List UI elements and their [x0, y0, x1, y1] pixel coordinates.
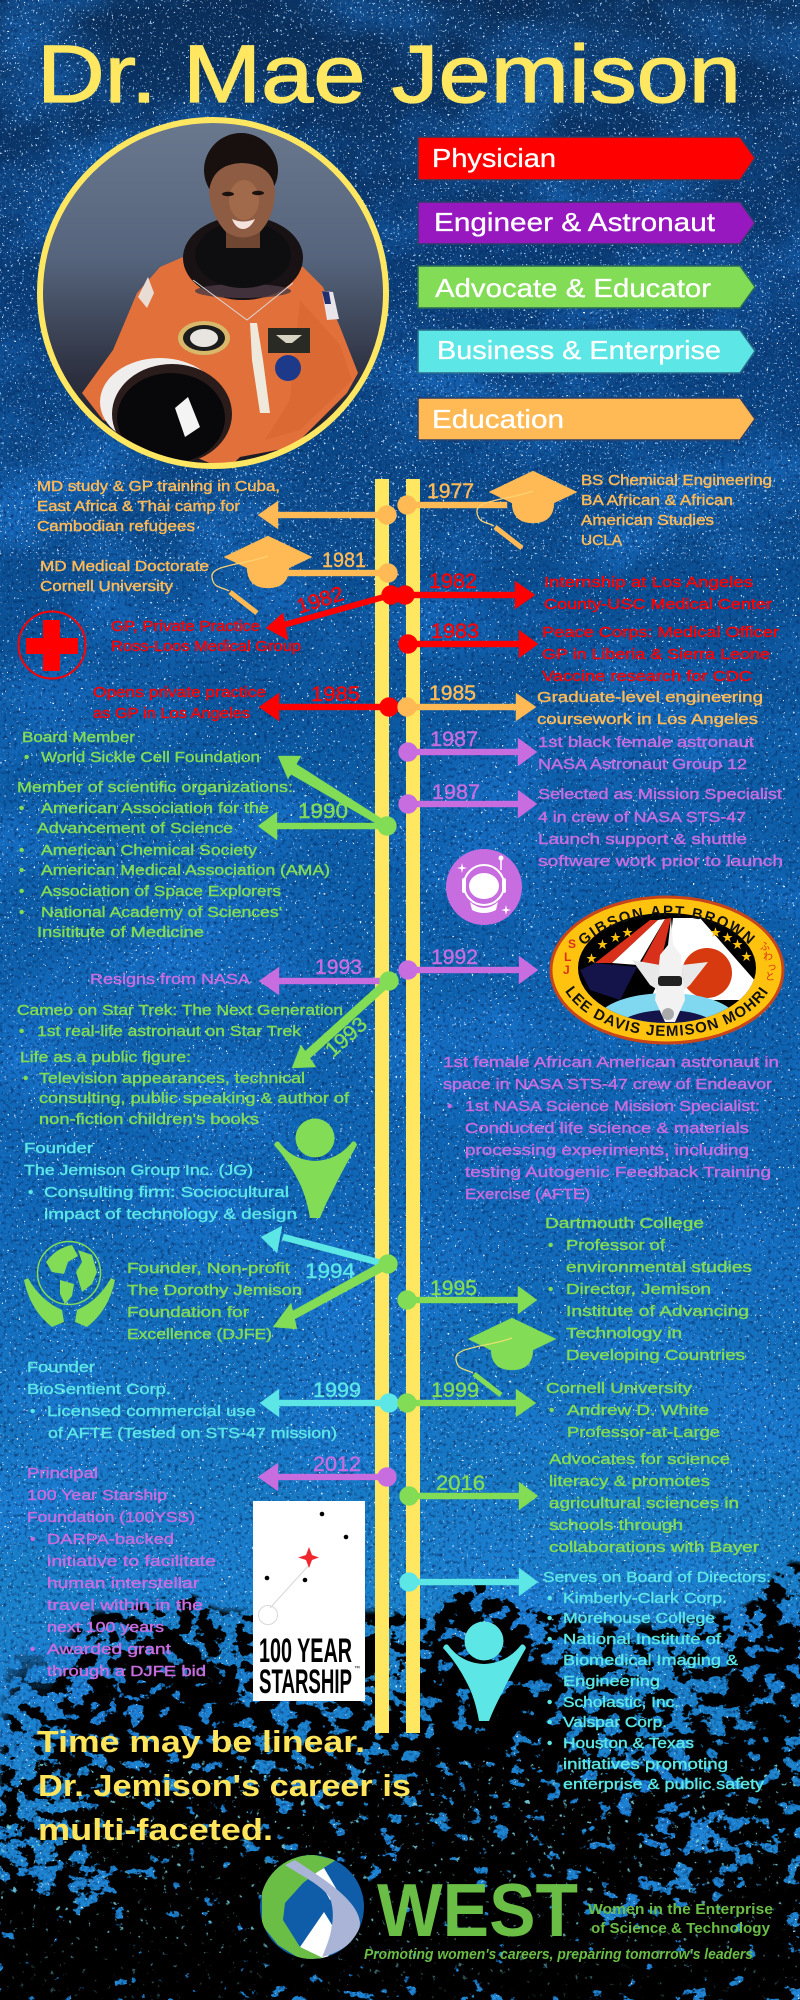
1990 advocate: board member and scientific organizations: National Academy of Sciences': [41, 904, 282, 921]
astronaut: first African American woman in space: Conducted life science & materials: [465, 1120, 749, 1137]
1990 advocate: board member and scientific organizations: [17, 729, 396, 941]
1995 advocate: Dartmouth College: Institute of Advancing: [566, 1303, 749, 1320]
1982 physician: GP private practice: GP, Private Practice: [111, 618, 260, 635]
1985 education: graduate engineering: [398, 682, 763, 728]
1977 education: BS and BA at UCLA: BA African & African: [581, 492, 733, 509]
1982 physician: internship: 1982: [429, 570, 477, 593]
2012 astronaut: 100 Year Starship: 100 Year Starship: [27, 1487, 167, 1504]
organisation name: Women in the Enterprise: [588, 1901, 773, 1918]
2012 astronaut: 100 Year Starship: [27, 1453, 396, 1680]
1987 astronaut: first black female astronaut: NASA Astronaut Group 12: [538, 756, 747, 773]
2016 advocate: science literacy: schools through: [549, 1517, 683, 1534]
STS-47 mission patch: ★: [741, 951, 752, 963]
1987 astronaut: first black female astronaut: 1st black female astronaut: [538, 734, 755, 751]
2012 astronaut: 100 Year Starship: DARPA-backed: [47, 1531, 174, 1548]
closing statement: Dr. Jemison's career is: [38, 1768, 411, 1803]
business: boards of directors: Houston & Texas: [563, 1735, 694, 1752]
business: boards of directors: •: [547, 1714, 552, 1731]
1999 advocate: Cornell University: Professor-at-Large: [567, 1424, 720, 1441]
1995 advocate: Dartmouth College: Director, Jemison: [566, 1281, 711, 1298]
business: boards of directors: National Institute of: [563, 1631, 722, 1648]
legend: physician: Physician: [432, 143, 556, 173]
1990 advocate: board member and scientific organizations: •: [19, 883, 24, 900]
2016 advocate: science literacy: [400, 1451, 759, 1556]
1999 business: BioSentient Corp: [27, 1359, 398, 1442]
1995 advocate: Dartmouth College: •: [548, 1237, 553, 1254]
business: boards of directors: Engineering: [563, 1673, 660, 1690]
business: boards of directors: •: [547, 1610, 552, 1627]
1977 education: BS and BA at UCLA: BS Chemical Engineering: [581, 472, 772, 489]
1990 advocate: board member and scientific organizations: •: [24, 749, 29, 766]
100 Year Starship logo: 100 YEAR: [259, 1632, 352, 1670]
portrait of Dr. Jemison in orange suit: [40, 120, 386, 470]
1987 astronaut: mission specialist: 1987: [432, 781, 480, 804]
1985 education: graduate engineering: coursework in Los Angeles: [537, 711, 758, 728]
1983 physician: Peace Corps: Peace Corps: Medical Officer: [542, 624, 779, 641]
1983 physician: Peace Corps: 1983: [431, 620, 479, 643]
astronaut: first African American woman in space: space in NASA STS-47 crew of Endeavor: [443, 1076, 772, 1093]
1990 advocate: board member and scientific organizations: American Medical Association (AMA): [41, 862, 330, 879]
business: boards of directors: •: [547, 1694, 552, 1711]
1993 advocate: Star Trek and public figure: •: [23, 1070, 28, 1087]
1999 business: BioSentient Corp: •: [30, 1403, 35, 1420]
1995 advocate: Dartmouth College: •: [548, 1281, 553, 1298]
2012 astronaut: 100 Year Starship: travel within in the: [47, 1597, 203, 1614]
1982 physician: GP private practice: Ross-Loos Medical Group: [111, 638, 301, 655]
astronaut: first African American woman in space: 1st female African American astronaut in: [443, 1054, 779, 1071]
advocate: Dorothy Jemison Foundation: Founder, Non-profit: [127, 1260, 291, 1277]
organisation name: of Science & Technology: [591, 1920, 771, 1937]
icon: globe in hands: [24, 1242, 115, 1327]
1990 advocate: board member and scientific organizations: American Association for the: [41, 800, 269, 817]
1999 business: BioSentient Corp: of AFTE (Tested on STS-47 mission): [48, 1425, 337, 1442]
1987 astronaut: mission specialist: 4 in crew of NASA STS-47: [538, 809, 746, 826]
2012 astronaut: 100 Year Starship: Principal: [27, 1465, 98, 1482]
cyan arrow to Jemison Group: 1994: [305, 1260, 355, 1283]
1993 advocate: Star Trek and public figure: 1st real-life astronaut on Star Trek: [37, 1023, 302, 1040]
icon: graduation cap: [456, 1318, 556, 1395]
1993 astronaut: resigns from NASA: [90, 956, 389, 995]
2016 advocate: science literacy: collaborations with Bayer: [549, 1539, 759, 1556]
2012 astronaut: 100 Year Starship: initiative to facilitate: [47, 1553, 216, 1570]
1990 advocate: board member and scientific organizations: •: [19, 800, 24, 817]
1987 astronaut: first black female astronaut: [398, 728, 755, 773]
1999 advocate: Cornell University: Cornell University: [546, 1380, 693, 1397]
1995 advocate: Dartmouth College: environmental studies: [566, 1259, 752, 1276]
legend: engineer and astronaut: Engineer & Astronaut: [434, 207, 716, 237]
legend: advocate and educator: [418, 266, 755, 308]
1999 advocate: Cornell University: •: [549, 1402, 554, 1419]
closing statement: [37, 1724, 411, 1847]
business: The Jemison Group: [24, 1140, 297, 1223]
1981 education: MD at Cornell: 1981: [322, 549, 366, 572]
1982 physician: internship: Internship at Los Angeles: [544, 574, 753, 591]
education: MD study and GP training abroad: [37, 478, 396, 535]
education: MD study and GP training abroad: East Africa & Thai camp for: [37, 498, 240, 515]
title: Dr. Mae Jemison: [37, 29, 741, 120]
1999 business: BioSentient Corp: 1999: [313, 1379, 361, 1402]
business: boards of directors: [400, 1568, 771, 1793]
1983 physician: Peace Corps: [398, 620, 779, 685]
2016 advocate: science literacy: Advocates for science: [549, 1451, 730, 1468]
1993 advocate: Star Trek and public figure: non-fiction children's books: [39, 1111, 259, 1128]
education: MD study and GP training abroad: MD study & GP training in Cuba,: [37, 478, 280, 495]
STS-47 mission patch: ★: [610, 932, 621, 944]
business: boards of directors: Serves on Board of Directors:: [543, 1569, 771, 1586]
business: boards of directors: •: [547, 1590, 552, 1607]
advocate: Dorothy Jemison Foundation: Foundation for: [127, 1304, 249, 1321]
astronaut: first African American woman in space: Exercise (AFTE): [465, 1186, 590, 1203]
business: boards of directors: Kimberly-Clark Corp.: [563, 1590, 727, 1607]
2012 astronaut: 100 Year Starship: •: [30, 1531, 35, 1548]
1993 advocate: Star Trek and public figure: Life as a public figure:: [20, 1049, 191, 1066]
1990 advocate: board member and scientific organizations: World Sickle Cell Foundation: [41, 749, 260, 766]
1999 business: BioSentient Corp: Founder: [27, 1359, 95, 1376]
organisation name: [588, 1901, 773, 1937]
astronaut: first African American woman in space: processing experiments, including: [465, 1142, 749, 1159]
2012 astronaut: 100 Year Starship: Awarded grant: [47, 1641, 172, 1658]
legend: engineer and astronaut: [418, 202, 755, 244]
1999 advocate: Cornell University: Andrew D. White: [567, 1402, 709, 1419]
STS-47 mission patch: と: [765, 971, 775, 983]
legend: advocate and educator: Advocate & Educator: [435, 273, 711, 303]
business: boards of directors: Biomedical Imaging &: [563, 1652, 738, 1669]
business: boards of directors: Scholastic, Inc.: [563, 1694, 679, 1711]
icon: astronaut helmet: [446, 849, 522, 925]
1987 astronaut: mission specialist: Selected as Mission Specialist: [538, 786, 783, 803]
legend: business and enterprise: Business & Enterprise: [437, 335, 721, 365]
1993 astronaut: resigns from NASA: 1993: [315, 956, 362, 979]
business: boards of directors: Valspar Corp.: [563, 1714, 667, 1731]
1994 arrows: [261, 1226, 398, 1329]
1993 astronaut: resigns from NASA: Resigns from NASA: [90, 971, 250, 988]
1985 physician: opens private practice: 1985: [311, 683, 360, 706]
1982 physician: internship: County-USC Medical Center: [544, 596, 772, 613]
1981 education: MD at Cornell: MD Medical Doctorate: [40, 558, 209, 575]
1993 advocate: Star Trek and public figure: consulting, public speaking & author of: [39, 1090, 350, 1107]
astronaut: first African American woman in space: testing Autogenic Feedback Training: [465, 1164, 771, 1181]
2016 advocate: science literacy: 2016: [436, 1472, 485, 1495]
1990 advocate: board member and scientific organizations: Insititute of Medicine: [37, 924, 204, 941]
1982 physician: internship: [396, 570, 772, 613]
1987 astronaut: mission specialist: [398, 781, 783, 870]
icon: graduation cap: [212, 536, 312, 613]
1993 advocate: Star Trek and public figure: Cameo on Star Trek: The Next Generation: [17, 1002, 343, 1019]
1982 physician: GP private practice: [111, 582, 400, 655]
business: The Jemison Group: •: [28, 1184, 33, 1201]
2012 astronaut: 100 Year Starship: 2012: [313, 1453, 361, 1476]
STS-47 mission patch: L: [564, 950, 571, 964]
business: boards of directors: •: [547, 1631, 552, 1648]
green arrow to Jemison Foundation: [273, 1254, 398, 1329]
1999 business: BioSentient Corp: Licensed commercial use: [47, 1403, 256, 1420]
legend: physician: [418, 137, 755, 180]
legend: education: [418, 398, 755, 440]
1990 advocate: board member and scientific organizations: •: [19, 862, 24, 879]
closing statement: multi-faceted.: [38, 1812, 273, 1847]
logo mark: [260, 1852, 364, 1960]
astronaut: first African American woman in space: 1st NASA Science Mission Specialist:: [465, 1098, 760, 1115]
WEST logo: [260, 1852, 773, 1963]
astronaut: first African American woman in space: [443, 1054, 779, 1203]
1999 advocate: Cornell University: 1999: [431, 1379, 479, 1402]
1990 advocate: board member and scientific organizations: •: [19, 842, 24, 859]
STS-47 mission patch: っ: [767, 962, 777, 973]
legend: business and enterprise: [418, 330, 755, 373]
1993 advocate: Star Trek and public figure: [17, 972, 398, 1128]
advocate: Dorothy Jemison Foundation: The Dorothy Jemison: [127, 1282, 302, 1299]
tagline: Promoting women's careers, preparing tomorrow's leaders: [364, 1946, 753, 1963]
2016 advocate: science literacy: agricultural sciences in: [549, 1495, 739, 1512]
2012 astronaut: 100 Year Starship: Foundation (100YSS): [27, 1509, 195, 1526]
1981 education: MD at Cornell: Cornell University: [40, 578, 174, 595]
STS-47 mission patch: ふ: [760, 941, 770, 953]
STS-47 mission patch: ★: [622, 927, 633, 939]
STS-47 mission patch: ★: [597, 939, 608, 951]
1992 astronaut arrow to mission patch: [398, 946, 538, 984]
100 Year Starship logo: [253, 1501, 365, 1701]
icon: green person: [274, 1118, 357, 1218]
2012 astronaut: 100 Year Starship: next 100 years: [47, 1619, 164, 1636]
1977 education: BS and BA at UCLA: [398, 471, 772, 549]
1993 advocate: Star Trek and public figure: Television appearances, technical: [39, 1070, 305, 1087]
1985 education: graduate engineering: Graduate-level engineering: [537, 689, 763, 706]
2012 astronaut: 100 Year Starship: through a DJFE bid: [47, 1663, 206, 1680]
1982 physician: GP private practice: 1982: [294, 582, 346, 618]
2016 advocate: science literacy: literacy & promotes: [549, 1473, 710, 1490]
business: boards of directors: enterprise & public safety: [563, 1776, 765, 1793]
1995 advocate: Dartmouth College: Developing Countries: [566, 1347, 745, 1364]
STS-47 mission patch: [550, 896, 784, 1044]
1990 advocate: board member and scientific organizations: •: [19, 904, 24, 921]
1985 physician: opens private practice: [93, 683, 398, 722]
STS-47 mission patch: ★: [732, 939, 743, 951]
education: MD study and GP training abroad: Cambodian refugees: [37, 518, 195, 535]
icon: red cross: [18, 612, 86, 678]
icon: graduation cap: [477, 471, 577, 548]
1990 advocate: board member and scientific organizations: Association of Space Explorers: [41, 883, 281, 900]
closing statement: Time may be linear.: [37, 1724, 365, 1759]
STS-47 mission patch: GIBSON APT BROWN: [579, 906, 756, 944]
1987 astronaut: mission specialist: software work prior to launch: [538, 853, 783, 870]
1993 advocate: Star Trek and public figure: 1993: [321, 1013, 372, 1062]
career category legend: [418, 137, 755, 440]
STS-47 mission patch: J: [563, 963, 570, 977]
1987 astronaut: first black female astronaut: 1987: [430, 728, 478, 751]
1985 physician: opens private practice: as GP in Los Angeles: [93, 705, 250, 722]
1977 education: BS and BA at UCLA: 1977: [427, 480, 474, 503]
1999 business: BioSentient Corp: BioSentient Corp.: [27, 1381, 171, 1398]
wordmark: WEST: [377, 1868, 578, 1952]
1995 advocate: Dartmouth College: Technology in: [566, 1325, 682, 1342]
business: The Jemison Group: impact of technology & design: [44, 1206, 297, 1223]
1977 education: BS and BA at UCLA: American Studies: [581, 512, 714, 529]
1981 education: MD at Cornell: [40, 536, 398, 613]
legend: education: Education: [432, 404, 564, 434]
advocate: Dorothy Jemison Foundation: [127, 1260, 302, 1343]
timeline rails: [375, 479, 420, 1733]
STS-47 mission patch: ★: [710, 927, 721, 939]
business: The Jemison Group: Founder: [24, 1140, 93, 1157]
business: The Jemison Group: Consulting firm: Sociocultural: [44, 1184, 289, 1201]
100 Year Starship logo: STARSHIP: [259, 1663, 352, 1701]
1990 advocate: board member and scientific organizations: 1990: [298, 800, 348, 823]
1977 education: BS and BA at UCLA: UCLA: [581, 532, 622, 549]
business: boards of directors: Morehouse College: [563, 1610, 715, 1627]
STS-47 mission patch: ★: [722, 932, 733, 944]
astronaut: first African American woman in space: •: [447, 1098, 452, 1115]
1985 physician: opens private practice: Opens private practice: [93, 684, 266, 701]
business: boards of directors: initiatives promoting: [563, 1756, 728, 1773]
1995 advocate: Dartmouth College: Professor of: [566, 1237, 666, 1254]
1983 physician: Peace Corps: Vaccine research for CDC: [542, 668, 752, 685]
icon: cyan person: [443, 1622, 526, 1721]
1983 physician: Peace Corps: GP in Liberia & Sierra Leone: [542, 646, 770, 663]
1995 advocate: Dartmouth College: 1995: [430, 1277, 477, 1300]
1999 advocate: Cornell University: [398, 1379, 720, 1441]
STS-47 mission patch: わ: [763, 951, 773, 963]
business: The Jemison Group: The Jemison Group Inc. (JG): [24, 1162, 253, 1179]
STS-47 mission patch: LEE DAVIS JEMISON MOHRI: [565, 986, 768, 1036]
2012 astronaut: 100 Year Starship: human interstellar: [47, 1575, 199, 1592]
1987 astronaut: mission specialist: Launch support & shuttle: [538, 831, 747, 848]
business: boards of directors: •: [547, 1735, 552, 1752]
2012 astronaut: 100 Year Starship: •: [30, 1641, 35, 1658]
1990 advocate: board member and scientific organizations: American Chemical Society: [41, 842, 258, 859]
1993 advocate: Star Trek and public figure: •: [19, 1023, 24, 1040]
1990 advocate: board member and scientific organizations: Member of scientific organizations:: [17, 779, 293, 796]
STS-47 mission patch: ★: [586, 953, 597, 965]
1995 advocate: Dartmouth College: [398, 1215, 752, 1395]
STS-47 mission patch: S: [568, 937, 576, 951]
1990 advocate: board member and scientific organizations: Advancement of Science: [37, 820, 233, 837]
1992 astronaut arrow to mission patch: 1992: [431, 946, 478, 969]
100 Year Starship logo: ™: [354, 1665, 360, 1672]
advocate: Dorothy Jemison Foundation: Excellence (DJFE): [127, 1326, 272, 1343]
1995 advocate: Dartmouth College: Dartmouth College: [545, 1215, 704, 1232]
1990 advocate: board member and scientific organizations: Board Member: [22, 729, 135, 746]
1985 education: graduate engineering: 1985: [429, 682, 476, 705]
